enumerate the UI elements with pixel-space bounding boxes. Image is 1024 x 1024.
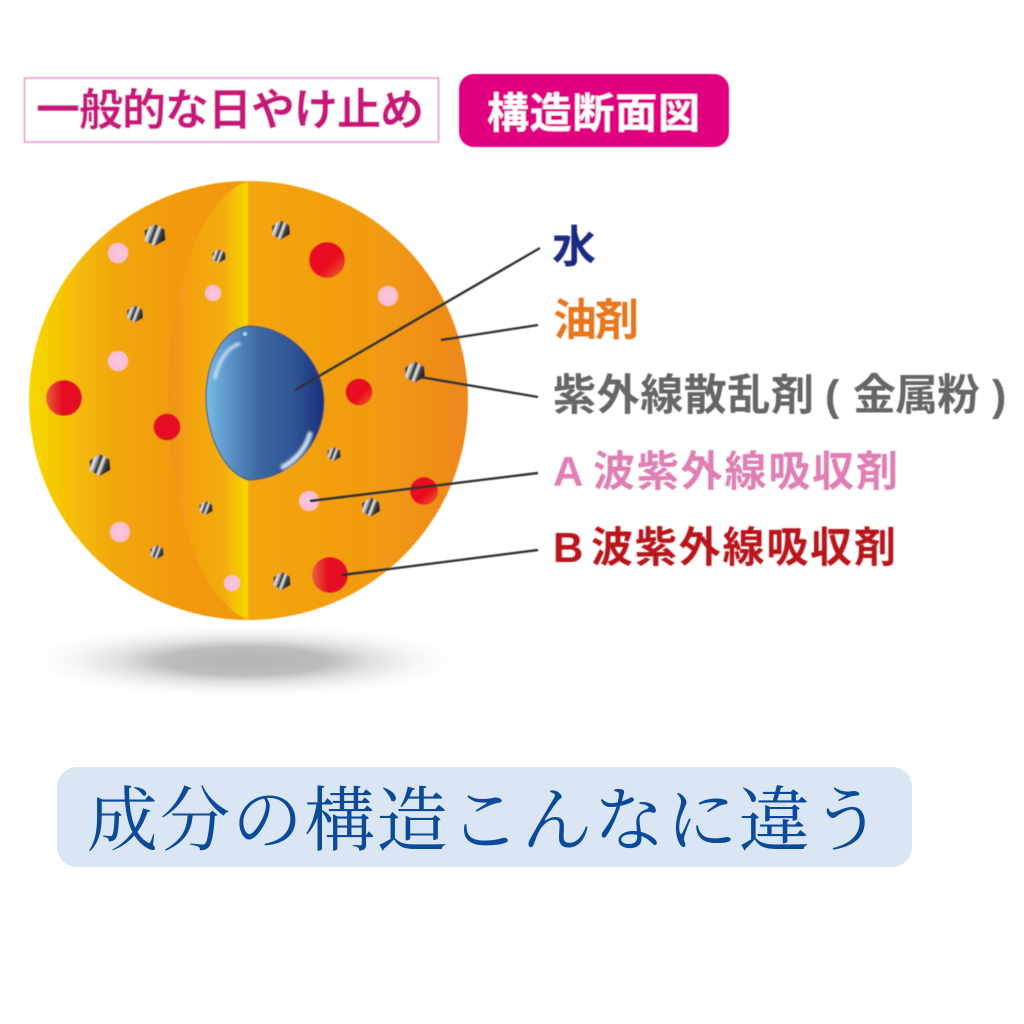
label: UV scattering agent (metal powder): ( bbox=[825, 372, 840, 420]
metal particles: UV scattering agent bbox=[90, 220, 425, 590]
heading: general sunscreen label box: 一般的な日やけ止め bbox=[36, 86, 424, 135]
label: UVB absorber: 波紫外線吸収剤 bbox=[591, 524, 896, 571]
heading: structure cross-section badge bbox=[459, 74, 729, 147]
sphere cross-section diagram bbox=[29, 181, 468, 620]
red particles: UVB absorber bbox=[46, 242, 438, 593]
sphere left hemisphere bbox=[29, 181, 248, 620]
leader lines bbox=[295, 248, 540, 575]
label: water: 水 bbox=[552, 223, 596, 272]
pink particles: UVA absorber bbox=[108, 243, 398, 591]
label: UV scattering agent (metal powder): 紫外線散乱剤 bbox=[553, 372, 814, 420]
inner lens of cut sphere bbox=[168, 181, 248, 620]
floor shadow under sphere bbox=[33, 625, 457, 697]
heading: structure cross-section badge: 構造断面図 bbox=[487, 90, 700, 137]
label: UVA absorber: 波紫外線吸収剤 bbox=[593, 448, 898, 495]
label: UVA absorber: A bbox=[553, 448, 583, 495]
sphere right hemisphere bbox=[248, 181, 468, 620]
water droplet bbox=[206, 326, 324, 480]
label: UV scattering agent (metal powder): ) bbox=[992, 372, 1006, 420]
caption banner: 成分の構造こんなに違う bbox=[87, 783, 882, 861]
label: UV scattering agent (metal powder): 金属粉 bbox=[853, 372, 980, 420]
label: UVB absorber: B bbox=[553, 524, 583, 571]
label: oil agent: 油剤 bbox=[553, 296, 639, 345]
